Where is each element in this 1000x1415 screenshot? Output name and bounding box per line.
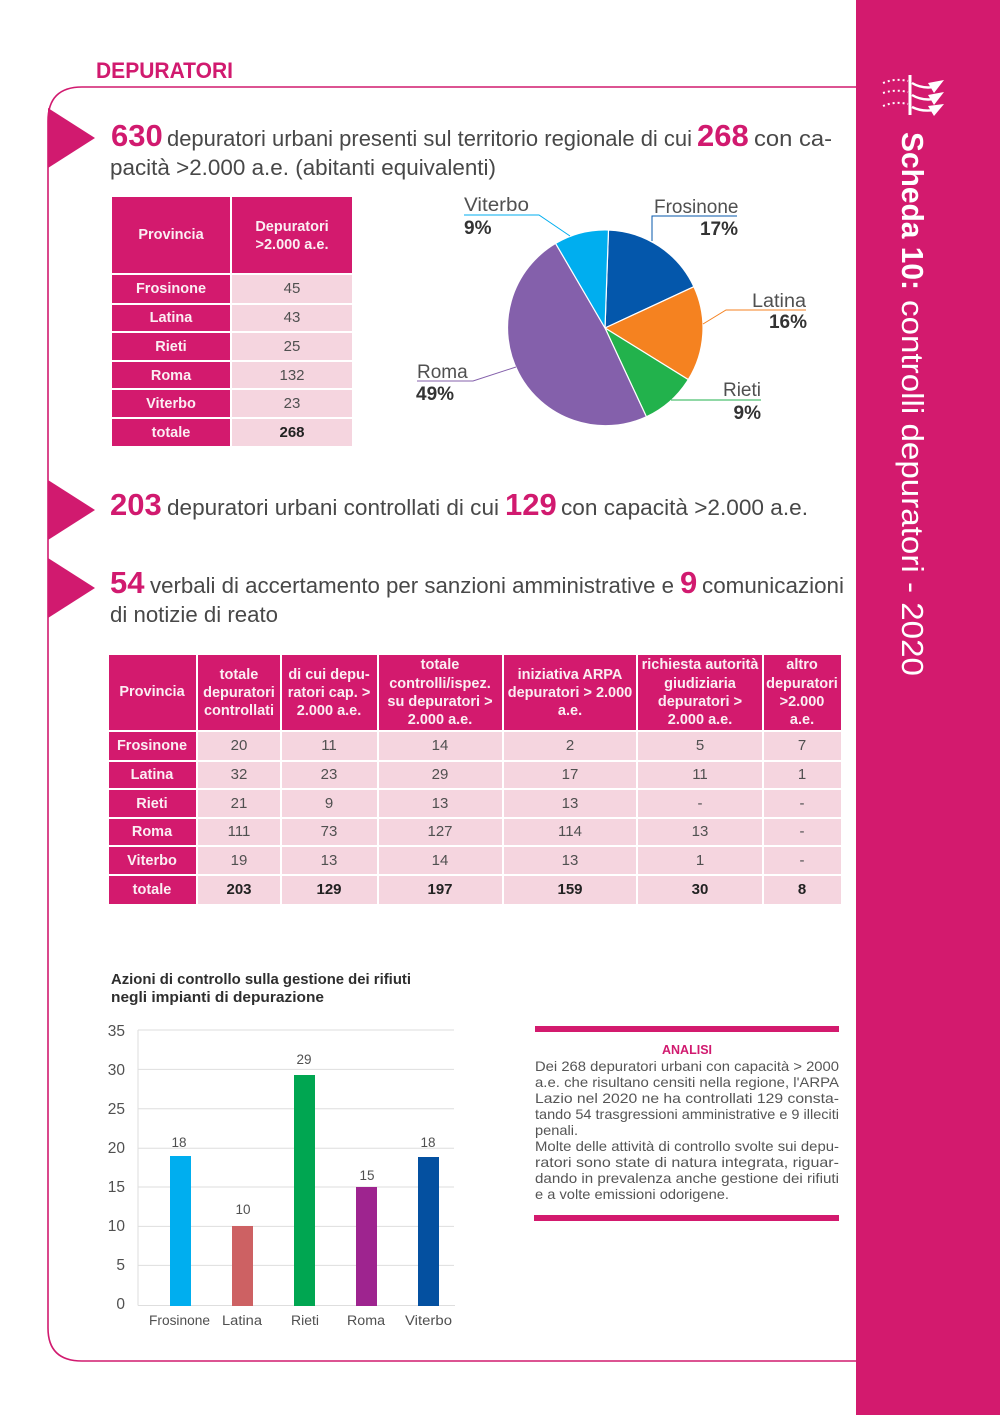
table: controlli per provincia: 73 bbox=[321, 823, 337, 840]
table: controlli per provincia: 30 bbox=[692, 881, 708, 898]
bar chart: 10 bbox=[235, 1202, 251, 1217]
bar chart: 29 bbox=[296, 1052, 312, 1067]
table: depuratori per provincia: Roma bbox=[151, 368, 192, 384]
table: controlli per provincia: altro bbox=[786, 657, 818, 673]
table: controlli per provincia: 114 bbox=[558, 823, 582, 840]
table: controlli per provincia: totale bbox=[220, 667, 258, 683]
text block: 54 verbali: di notizie di reato bbox=[110, 602, 278, 627]
text block: 54 verbali: 9 bbox=[680, 565, 697, 600]
label: Frosinone: 17% bbox=[700, 219, 738, 240]
table: controlli per provincia: 5 bbox=[696, 737, 704, 754]
text block: 630 depuratori: depuratori urbani presenti sul territorio regionale di cui bbox=[167, 126, 692, 151]
table: controlli per provincia: depuratori bbox=[203, 685, 275, 701]
table: controlli per provincia: 1 bbox=[696, 852, 704, 869]
panel: analisi: ANALISI bbox=[662, 1043, 712, 1057]
table: depuratori per provincia: totale bbox=[152, 425, 190, 441]
panel: analisi: Dei 268 depuratori urbani con capacità > 2000 bbox=[535, 1059, 839, 1074]
text block: 630 depuratori: 630 bbox=[111, 118, 163, 153]
bar chart: 18 bbox=[171, 1135, 187, 1150]
table: depuratori per provincia: Viterbo bbox=[146, 396, 196, 412]
table: controlli per provincia: 159 bbox=[557, 881, 583, 898]
sidebar title: Scheda 10: bbox=[895, 132, 930, 290]
table: controlli per provincia: 19 bbox=[231, 852, 247, 869]
bar chart bbox=[108, 1023, 455, 1328]
bar chart: Rieti bbox=[291, 1313, 319, 1328]
bar chart: 35 bbox=[108, 1023, 125, 1040]
table: controlli per provincia: di cui depu- bbox=[288, 667, 370, 683]
table: controlli per provincia: Rieti bbox=[136, 796, 168, 812]
table: controlli per provincia: 23 bbox=[321, 766, 337, 783]
chart title: Azioni di controllo sulla gestione dei rifiuti bbox=[111, 972, 411, 988]
table: depuratori per provincia: 25 bbox=[284, 338, 300, 355]
table: depuratori per provincia: 43 bbox=[284, 309, 300, 326]
arrow marker 3 bbox=[48, 558, 95, 618]
table: controlli per provincia: >2.000 bbox=[780, 694, 824, 710]
panel: analisi bbox=[534, 1026, 840, 1221]
table: controlli per provincia: Viterbo bbox=[127, 853, 177, 869]
table: controlli per provincia: iniziativa ARPA bbox=[518, 667, 623, 683]
bar chart: 15 bbox=[108, 1179, 125, 1196]
text block: 630 depuratori: 268 bbox=[697, 118, 749, 153]
bar chart: Roma bbox=[347, 1313, 386, 1328]
table: controlli per provincia: 13 bbox=[562, 852, 578, 869]
table: controlli per provincia: Provincia bbox=[119, 684, 186, 700]
table: controlli per provincia: 2.000 a.e. bbox=[408, 712, 472, 728]
side band bbox=[856, 0, 1000, 1415]
bar chart: Latina bbox=[222, 1313, 263, 1328]
panel: analisi: a.e. che risultano censiti nella regione, l'ARPA bbox=[535, 1075, 840, 1090]
table: depuratori per provincia: 45 bbox=[284, 280, 300, 297]
table: controlli per provincia: Latina bbox=[131, 767, 174, 783]
sidebar title bbox=[895, 132, 930, 676]
text block: 203 depuratori: 129 bbox=[505, 487, 557, 522]
bar chart: 20 bbox=[108, 1140, 125, 1157]
panel: analisi: ratori sono state di natura integrata, riguar- bbox=[535, 1155, 839, 1170]
text block: 203 depuratori: 203 bbox=[110, 487, 162, 522]
table: controlli per provincia: 14 bbox=[432, 852, 448, 869]
panel: analisi: Lazio nel 2020 ne ha controllati 129 consta- bbox=[535, 1091, 839, 1106]
table: controlli per provincia: totale bbox=[133, 882, 171, 898]
bar: Frosinone bbox=[170, 1156, 191, 1306]
table: controlli per provincia: 1 bbox=[798, 766, 806, 783]
arrow marker 2 bbox=[48, 480, 95, 540]
table: controlli per provincia: 29 bbox=[432, 766, 448, 783]
table: controlli per provincia: 11 bbox=[321, 737, 337, 754]
table: controlli per provincia: controlli/ispez. bbox=[389, 676, 491, 692]
bar chart: 15 bbox=[359, 1168, 375, 1183]
heading: DEPURATORI bbox=[96, 58, 233, 83]
label: Viterbo: Viterbo bbox=[464, 195, 529, 216]
bar: Latina bbox=[232, 1226, 253, 1306]
table: depuratori per provincia: 132 bbox=[279, 367, 305, 384]
label: Frosinone bbox=[652, 197, 738, 241]
table: controlli per provincia: 13 bbox=[321, 852, 337, 869]
bar chart: 30 bbox=[108, 1062, 125, 1079]
table: controlli per provincia: 32 bbox=[231, 766, 247, 783]
table: controlli per provincia: 21 bbox=[231, 795, 247, 812]
table: controlli per provincia: - bbox=[800, 795, 804, 812]
table: controlli per provincia: a.e. bbox=[790, 712, 814, 728]
table: controlli per provincia: - bbox=[698, 795, 702, 812]
table: controlli per provincia: su depuratori > bbox=[387, 694, 493, 710]
table: controlli per provincia: 127 bbox=[427, 823, 453, 840]
chart title: negli impianti di depurazione bbox=[111, 990, 324, 1006]
text block: 54 verbali bbox=[110, 565, 844, 627]
table: controlli per provincia: depuratori > bbox=[658, 694, 742, 710]
bar chart: 10 bbox=[108, 1218, 125, 1235]
text block: 203 depuratori: depuratori urbani controllati di cui bbox=[167, 495, 499, 520]
table: controlli per provincia: 2.000 a.e. bbox=[297, 703, 361, 719]
panel: analisi: Molte delle attività di controllo svolte sui depu- bbox=[535, 1139, 839, 1154]
table: controlli per provincia: totale bbox=[421, 657, 459, 673]
label: Rieti: Rieti bbox=[723, 380, 761, 401]
bar chart: 25 bbox=[108, 1101, 125, 1118]
sidebar title: controlli depuratori - 2020 bbox=[895, 300, 930, 676]
table: controlli per provincia: 7 bbox=[798, 737, 806, 754]
label: Viterbo bbox=[464, 195, 570, 239]
label: Frosinone: Frosinone bbox=[654, 197, 738, 218]
label: Latina: Latina bbox=[752, 291, 806, 312]
panel: analisi: penali. bbox=[535, 1123, 578, 1138]
bar chart: Viterbo bbox=[405, 1313, 452, 1328]
table: depuratori per provincia bbox=[112, 197, 352, 446]
table: controlli per provincia: 2.000 a.e. bbox=[668, 712, 732, 728]
text block: 54 verbali: verbali di accertamento per sanzioni amministrative e bbox=[150, 573, 674, 598]
table: depuratori per provincia: 23 bbox=[284, 395, 300, 412]
text block: 54 verbali: comunicazioni bbox=[702, 573, 844, 598]
table: controlli per provincia: depuratori > 2.000 bbox=[508, 685, 632, 701]
bar chart: 18 bbox=[420, 1135, 436, 1150]
table: controlli per provincia: 8 bbox=[798, 881, 806, 898]
arrow marker 1 bbox=[48, 108, 95, 168]
label: Viterbo: 9% bbox=[464, 218, 492, 239]
bar chart: 5 bbox=[116, 1257, 125, 1274]
icon: depuration flow bbox=[883, 75, 944, 116]
table: controlli per provincia: 20 bbox=[231, 737, 247, 754]
table: controlli per provincia: a.e. bbox=[558, 703, 582, 719]
table: controlli per provincia: 203 bbox=[226, 881, 252, 898]
label: Rieti bbox=[671, 380, 761, 424]
table: controlli per provincia: giudiziaria bbox=[664, 676, 737, 692]
table: controlli per provincia: 2 bbox=[566, 737, 574, 754]
text block: 630 depuratori: con ca- bbox=[754, 126, 832, 151]
table: controlli per provincia: - bbox=[800, 823, 804, 840]
table: controlli per provincia: 129 bbox=[316, 881, 342, 898]
label: Rieti: 9% bbox=[734, 403, 761, 424]
label: Roma: Roma bbox=[417, 362, 468, 383]
table: controlli per provincia: Roma bbox=[132, 824, 173, 840]
table: controlli per provincia: ratori cap. > bbox=[288, 685, 370, 701]
table: depuratori per provincia: Frosinone bbox=[136, 281, 206, 297]
table: controlli per provincia: 9 bbox=[325, 795, 333, 812]
bar chart: 0 bbox=[116, 1296, 125, 1313]
table: depuratori per provincia: Rieti bbox=[155, 339, 187, 355]
table: depuratori per provincia: >2.000 a.e. bbox=[256, 237, 328, 253]
text block: 630 depuratori: pacità >2.000 a.e. (abitanti equivalenti) bbox=[110, 155, 496, 180]
label: Roma: 49% bbox=[416, 384, 454, 405]
table: controlli per provincia: richiesta autorità bbox=[642, 657, 759, 673]
table: controlli per provincia: 13 bbox=[692, 823, 708, 840]
bar: Roma bbox=[356, 1187, 377, 1306]
table: depuratori per provincia: Provincia bbox=[138, 227, 205, 243]
table: controlli per provincia: - bbox=[800, 852, 804, 869]
table: controlli per provincia: depuratori bbox=[766, 676, 838, 692]
table: controlli per provincia bbox=[109, 655, 841, 904]
label: Roma bbox=[416, 362, 516, 405]
table: depuratori per provincia: Latina bbox=[150, 310, 193, 326]
bar: Rieti bbox=[294, 1075, 315, 1306]
table: controlli per provincia: 111 bbox=[228, 823, 250, 840]
panel frame bbox=[48, 87, 857, 1361]
table: controlli per provincia: 17 bbox=[562, 766, 578, 783]
chart title bbox=[111, 972, 411, 1006]
table: controlli per provincia: 11 bbox=[692, 766, 708, 783]
table: controlli per provincia: Frosinone bbox=[117, 738, 187, 754]
table: depuratori per provincia: 268 bbox=[279, 424, 305, 441]
label: Latina bbox=[703, 291, 807, 333]
text block: 54 verbali: 54 bbox=[110, 565, 145, 600]
text block: 203 depuratori: con capacità >2.000 a.e. bbox=[561, 495, 808, 520]
table: controlli per provincia: 14 bbox=[432, 737, 448, 754]
table: controlli per provincia: controllati bbox=[204, 703, 274, 719]
pie chart bbox=[416, 195, 807, 426]
panel: analisi: e a volte emissioni odorigene. bbox=[535, 1187, 729, 1202]
panel: analisi: dando in prevalenza anche gestione dei rifiuti bbox=[535, 1171, 839, 1186]
table: controlli per provincia: 13 bbox=[432, 795, 448, 812]
bar: Viterbo bbox=[418, 1157, 439, 1306]
table: depuratori per provincia: Depuratori bbox=[255, 219, 329, 235]
bar chart: Frosinone bbox=[149, 1313, 210, 1328]
table: controlli per provincia: 197 bbox=[427, 881, 453, 898]
table: controlli per provincia: 13 bbox=[562, 795, 578, 812]
panel: analisi: tando 54 trasgressioni amministrative e 9 illeciti bbox=[535, 1107, 839, 1122]
text block: 203 depuratori bbox=[110, 487, 808, 522]
label: Latina: 16% bbox=[769, 312, 807, 333]
text block: 630 depuratori bbox=[110, 118, 832, 180]
